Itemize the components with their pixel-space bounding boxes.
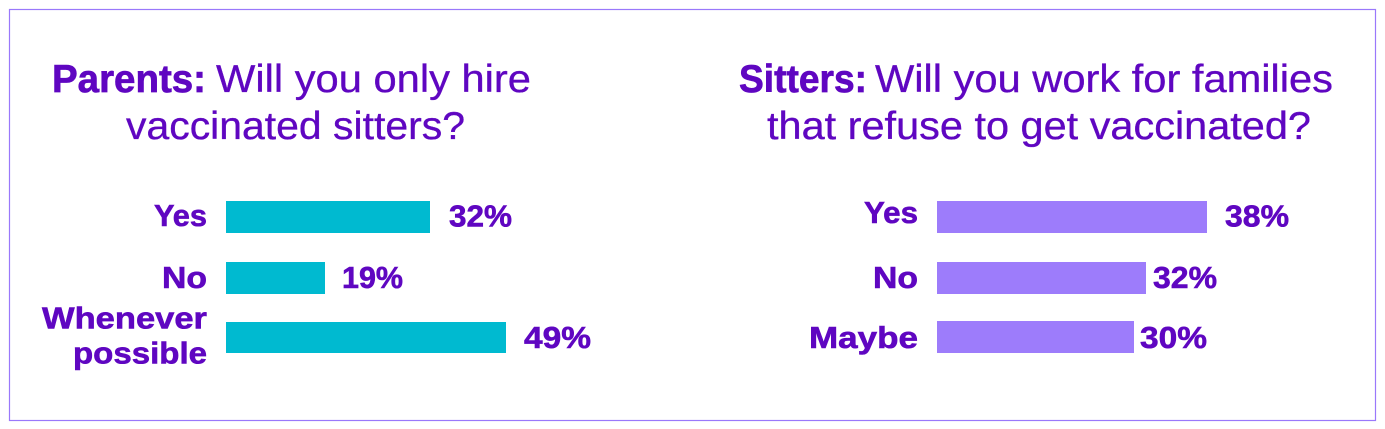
- row: maybe 30%: Maybe: [809, 320, 918, 355]
- row: yes 32%: Yes: [154, 198, 207, 233]
- row: yes 38%: Yes: [864, 195, 918, 230]
- row: maybe 30%: [809, 320, 1207, 355]
- heading: sitters question: that refuse to get vaccinated?: [767, 105, 1311, 148]
- row: yes 32%: [154, 198, 512, 234]
- row: yes 32%: 32%: [449, 198, 512, 234]
- bar chart: sitters: [809, 195, 1289, 355]
- panel: parents: [42, 58, 591, 370]
- row: yes 38%: [864, 195, 1289, 234]
- row: no 32%: [873, 260, 1217, 295]
- heading: sitters question: Will you work for families: [875, 58, 1333, 101]
- row: whenever possible 49%: 49%: [524, 320, 591, 355]
- row: whenever possible 49%: [42, 300, 591, 370]
- row: no 32%: No: [873, 260, 918, 295]
- row: whenever possible 49%: Whenever: [42, 300, 207, 336]
- heading: parents question: vaccinated sitters?: [126, 105, 465, 148]
- row: maybe 30%: 30%: [1140, 320, 1207, 355]
- row: no 32%: 32%: [1153, 260, 1217, 295]
- heading: sitters question: [739, 58, 1333, 148]
- row: whenever possible 49%: possible: [73, 336, 207, 370]
- heading: parents question: [52, 58, 531, 148]
- heading: parents question: Parents:: [52, 58, 206, 101]
- panel: sitters: [739, 58, 1333, 355]
- row: no 19%: [162, 260, 403, 295]
- heading: parents question: Will you only hire: [216, 58, 531, 101]
- row: no 19%: 19%: [342, 260, 403, 295]
- heading: sitters question: Sitters:: [739, 58, 867, 101]
- row: no 19%: No: [162, 260, 207, 295]
- row: yes 38%: 38%: [1225, 198, 1289, 234]
- bar chart: parents: [42, 198, 591, 370]
